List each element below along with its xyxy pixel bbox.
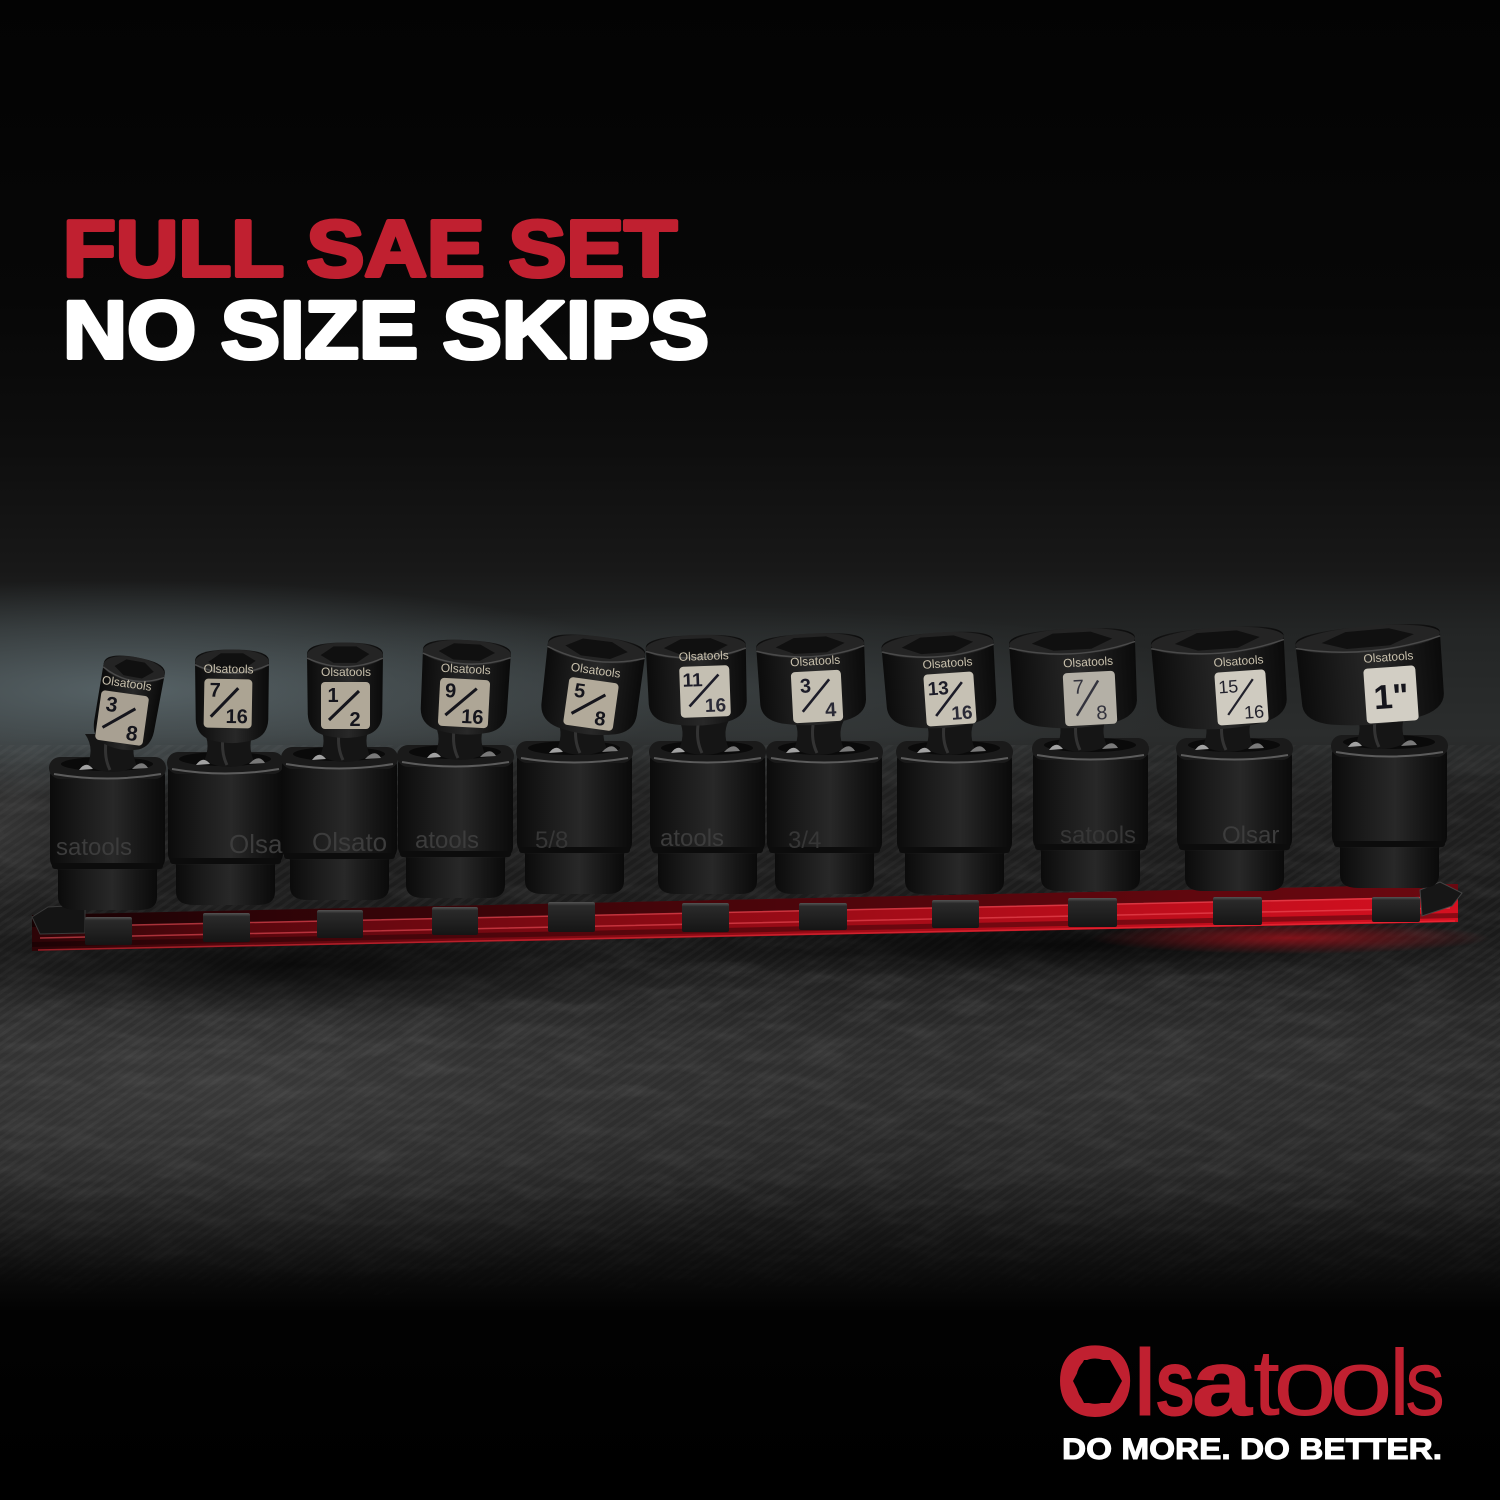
socket 3/4: 3 [799, 675, 812, 698]
title line: no size skips: NO SIZE SKIPS [63, 285, 709, 376]
socket 1/2 [281, 642, 398, 900]
socket 13/16: 13 [927, 678, 950, 701]
socket 13/16: 16 [951, 702, 973, 725]
socket 7/16: Olsatools [203, 662, 254, 676]
socket 11/16: atools [660, 825, 724, 852]
socket 7/16 [167, 650, 284, 905]
socket 15/16: 15 [1218, 676, 1239, 698]
title [63, 204, 709, 376]
socket 13/16: Olsatools [922, 654, 973, 672]
socket 3/8: 3 [104, 693, 119, 717]
socket 3/4: 3/4 [788, 827, 821, 854]
socket 11/16 [645, 633, 766, 894]
socket 1 inch: Olsatools [1363, 648, 1414, 666]
logo tagline: DO MORE. DO BETTER. [1062, 1433, 1442, 1466]
logo wordmark: l [1135, 1330, 1155, 1435]
socket 15/16: Olsatools [1213, 652, 1264, 670]
socket 3/8 [49, 652, 167, 910]
socket 9/16: 16 [461, 706, 484, 729]
socket 1/2: 2 [349, 709, 361, 731]
rail clips [85, 897, 1420, 945]
socket 5/8: 8 [593, 708, 607, 731]
socket 7/16: 7 [209, 680, 221, 702]
socket 1/2: Olsatools [321, 665, 371, 679]
socket 5/8: 5/8 [535, 827, 568, 854]
socket 1 inch [1294, 620, 1448, 888]
title line: full SAE set: FULL SAE SET [63, 204, 677, 293]
logo wordmark [1057, 1326, 1445, 1436]
logo wordmark: t [1253, 1330, 1280, 1435]
socket 15/16: 16 [1243, 701, 1265, 723]
socket 5/8: 5 [573, 680, 587, 703]
brand logo [1057, 1326, 1445, 1466]
socket 7/16: 16 [225, 706, 248, 728]
socket 15/16: Olsar [1222, 822, 1279, 849]
socket 3/4 [756, 631, 883, 894]
socket 9/16: 9 [444, 680, 457, 703]
logo wordmark: O [1057, 1326, 1133, 1436]
socket 7/8: satools [1060, 822, 1136, 849]
logo wordmark: s [1155, 1330, 1195, 1435]
socket 7/8 [1008, 625, 1149, 891]
socket 7/16: Olsa [229, 829, 283, 859]
logo wordmark: o [1273, 1330, 1337, 1435]
logo wordmark: l [1389, 1330, 1410, 1435]
socket rail [32, 882, 1462, 951]
socket 7/8: Olsatools [1063, 654, 1113, 670]
socket 3/8: 8 [124, 722, 140, 746]
socket 3/4: Olsatools [790, 653, 841, 669]
logo wordmark: s [1405, 1330, 1445, 1435]
logo wordmark: o [1329, 1330, 1393, 1435]
socket 3/8: Olsatools [101, 673, 153, 694]
background: dark studio with fabric surface [0, 322, 1500, 1292]
socket 15/16 [1150, 623, 1293, 891]
socket 3/8: satools [56, 834, 132, 861]
socket 9/16: atools [415, 827, 479, 854]
socket 1/2: Olsato [312, 827, 387, 857]
socket 1/2: 1 [327, 685, 339, 707]
socket 5/8 [516, 630, 647, 894]
socket 11/16: 11 [682, 670, 703, 692]
socket 11/16: 16 [705, 695, 726, 717]
logo wordmark: a [1192, 1330, 1253, 1435]
socket 7/8: 7 [1072, 676, 1085, 699]
socket 13/16 [881, 629, 1013, 894]
socket 1 inch: 1" [1372, 677, 1410, 717]
socket 9/16: Olsatools [440, 661, 491, 677]
socket 3/4: 4 [825, 699, 838, 722]
socket 7/8: 8 [1096, 702, 1108, 725]
socket 5/8: Olsatools [570, 660, 621, 681]
socket 9/16 [397, 638, 514, 898]
socket 11/16: Olsatools [679, 648, 729, 664]
